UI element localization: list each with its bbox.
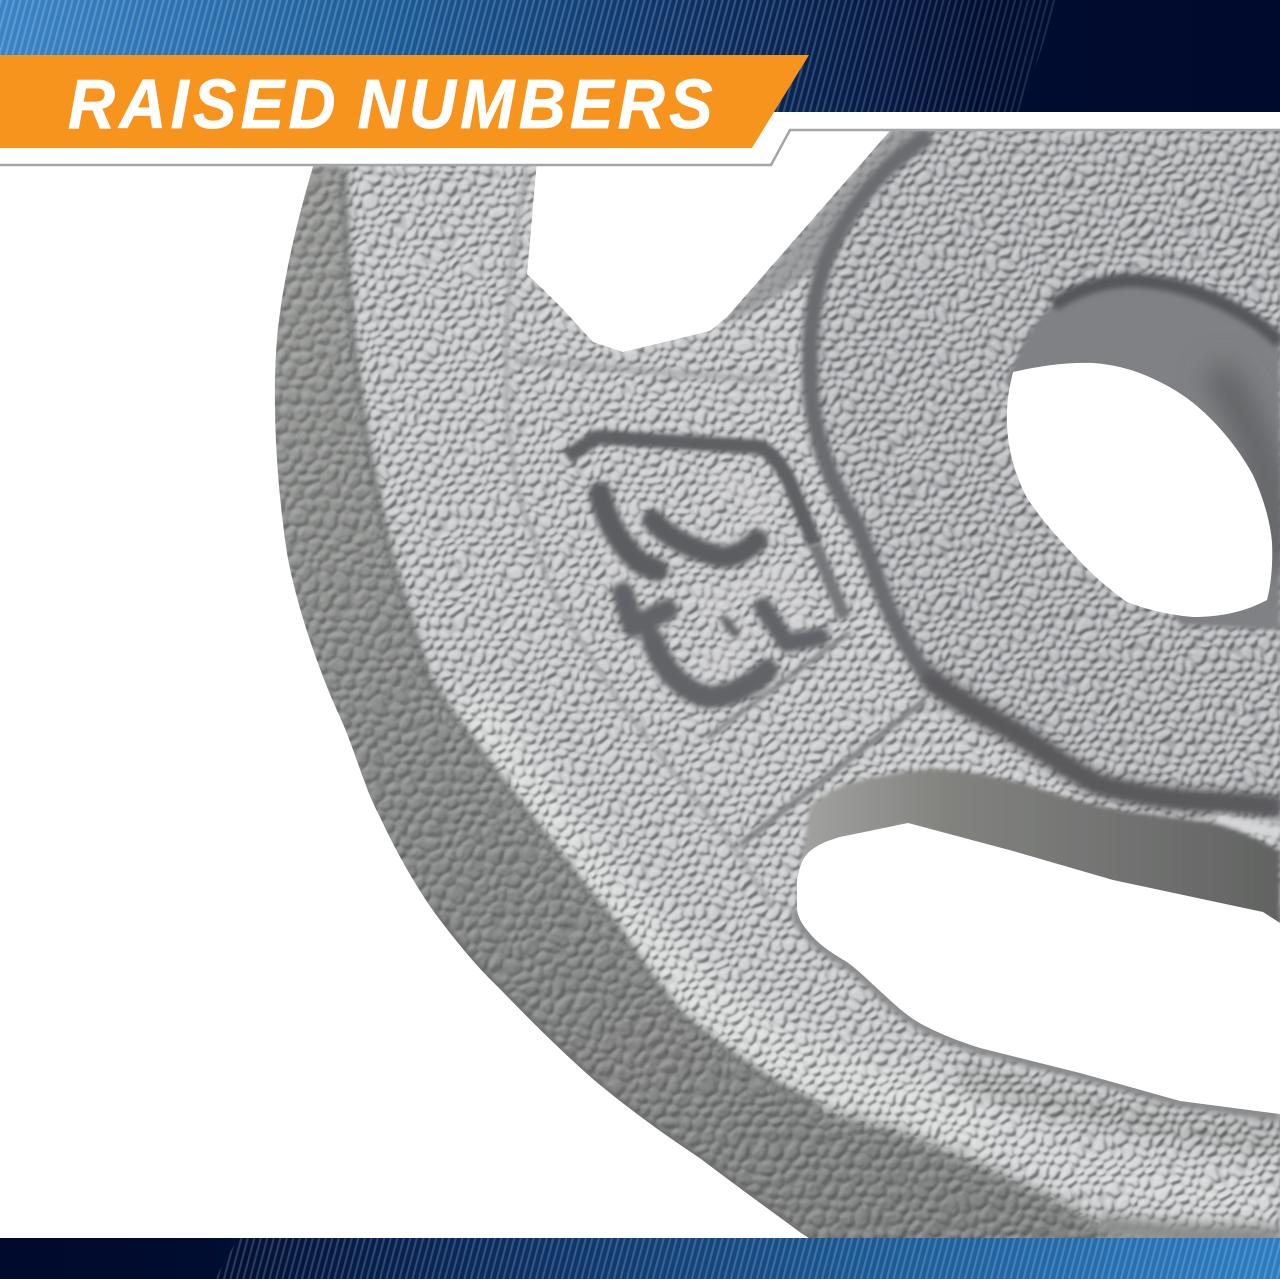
rim inner seam [343, 170, 820, 1108]
recess lower edge [707, 632, 850, 738]
lower spoke dark wall [795, 769, 1280, 935]
hub face tone [810, 125, 1280, 805]
lower opening edge shade [797, 909, 1280, 1116]
lower face highlight [470, 700, 1000, 1140]
rim outer dark edge [434, 912, 801, 1233]
bubbled surface texture [260, 110, 1280, 1245]
upper spoke side wall [720, 125, 945, 325]
digit 5 shadow [623, 593, 820, 697]
lower ring mid tone [960, 1075, 1280, 1140]
title: RAISED NUMBERS [68, 66, 712, 144]
lower ring highlight [990, 1135, 1280, 1200]
hole wall dark upper edge [1053, 280, 1280, 342]
spoke crossbar groove [513, 360, 780, 381]
hub groove [810, 135, 1280, 807]
raised number 25: 25 [533, 431, 874, 728]
hub groove deep shadow [925, 675, 1280, 807]
rim side wall [274, 166, 1124, 1238]
face ring groove [506, 170, 773, 908]
recessed number plate [562, 426, 853, 741]
digit 2 shadow [600, 493, 757, 570]
weight plate photo [274, 131, 1280, 1238]
top banner: blue gradient with diagonal stripes [0, 0, 1280, 112]
orange title banner [0, 55, 809, 148]
lower rim grey fade [1100, 1225, 1280, 1237]
hole wall right shadow [1215, 370, 1280, 570]
centre hole inner wall [1005, 278, 1280, 630]
recess top and right shadow [567, 437, 815, 545]
rim mottled surface [275, 166, 1120, 1238]
bottom banner: blue gradient with diagonal stripes [0, 1238, 1280, 1279]
lower spoke groove [740, 700, 925, 845]
white strip and grey rule under header [0, 112, 1280, 165]
bubble highlights [341, 131, 1280, 1226]
right lower light ridge [1215, 820, 1280, 833]
